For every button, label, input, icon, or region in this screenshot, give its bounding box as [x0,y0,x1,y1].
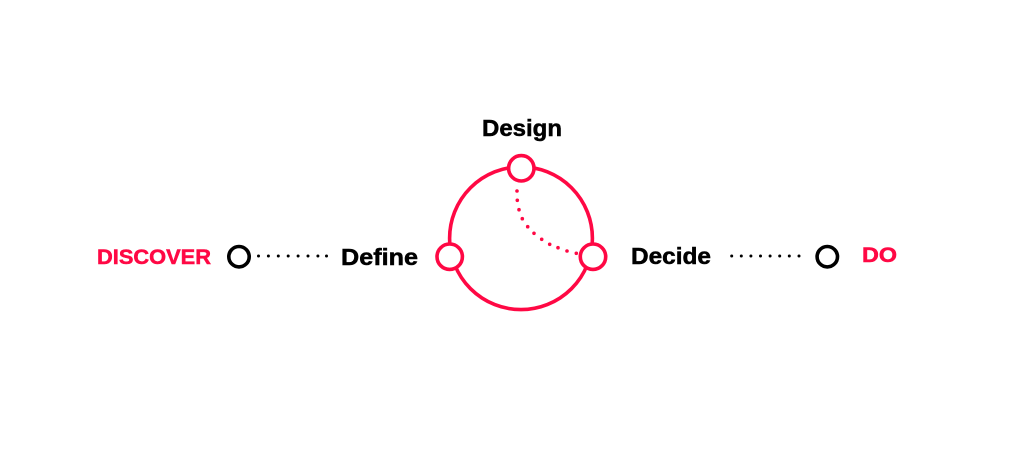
icon: discover node [229,247,249,267]
label: Decide: Decide [631,243,711,269]
node: decide [580,244,606,269]
heading: DISCOVER: DISCOVER [97,246,211,269]
dotted arc: design to decide [515,189,578,255]
node: design [509,156,534,181]
cycle diagram [437,156,606,310]
heading: DO: DO [862,244,897,267]
dotted connector: discover to define [257,254,328,258]
node: define [437,244,462,269]
icon: do node [817,247,838,267]
dotted connector: decide to do [730,254,800,258]
main ring [450,167,592,310]
label: Define: Define [341,244,418,270]
label: Design: Design [482,115,562,141]
